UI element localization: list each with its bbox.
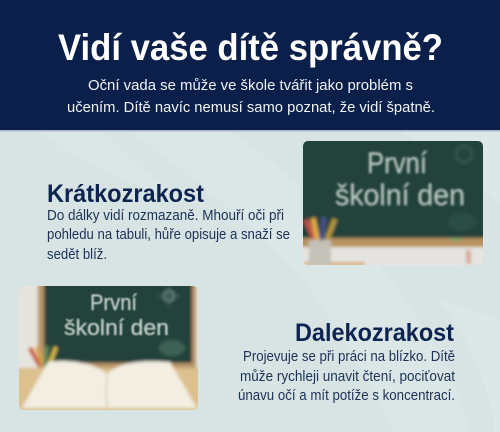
heading: Dalekozrakost: Dalekozrakost xyxy=(295,319,455,347)
chalk text: školní den xyxy=(335,179,465,212)
title: Vidí vaše dítě správně? xyxy=(58,27,443,68)
header band xyxy=(0,0,500,132)
chalk text: První xyxy=(90,290,137,315)
text block: Krátkozrakost: sedět blíž. xyxy=(47,247,107,263)
heading: Krátkozrakost: Krátkozrakost xyxy=(47,180,205,208)
panel: long-sightedness photo xyxy=(19,286,198,410)
chalkboard xyxy=(298,136,488,239)
wooden shelf xyxy=(298,238,488,247)
subtitle: učením. Dítě navíc nemusí samo poznat, že vidí špatně. xyxy=(67,99,435,116)
chalk text xyxy=(64,292,169,336)
chalkboard xyxy=(44,282,192,363)
text block: Krátkozrakost xyxy=(47,208,290,263)
desk xyxy=(15,368,205,413)
wooden board frame xyxy=(38,282,196,369)
chalk text: První xyxy=(367,147,428,180)
panel: short-sightedness photo xyxy=(298,136,488,266)
text block: Dalekozrakost: únavu očí a mít potíže s koncentrací. xyxy=(238,388,455,404)
pencils and cup xyxy=(306,217,335,242)
pencils xyxy=(30,346,56,366)
subtitle: Oční vada se může ve škole tvářit jako problém s xyxy=(88,77,413,94)
text block: Dalekozrakost: Projevuje se při práci na blízko. Dítě xyxy=(243,349,455,365)
text block: Krátkozrakost: pohledu na tabuli, hůře opisuje a snaží se xyxy=(47,227,290,243)
subtitle xyxy=(67,77,435,116)
chalk text: školní den xyxy=(64,315,169,340)
chalk text xyxy=(334,149,465,207)
text block: Dalekozrakost xyxy=(238,349,455,404)
text block: Krátkozrakost: Do dálky vidí rozmazaně. Mhouří oči při xyxy=(47,208,284,224)
text block: Dalekozrakost: může rychleji unavit čtení, pociťovat xyxy=(240,369,455,385)
open book xyxy=(22,361,197,408)
